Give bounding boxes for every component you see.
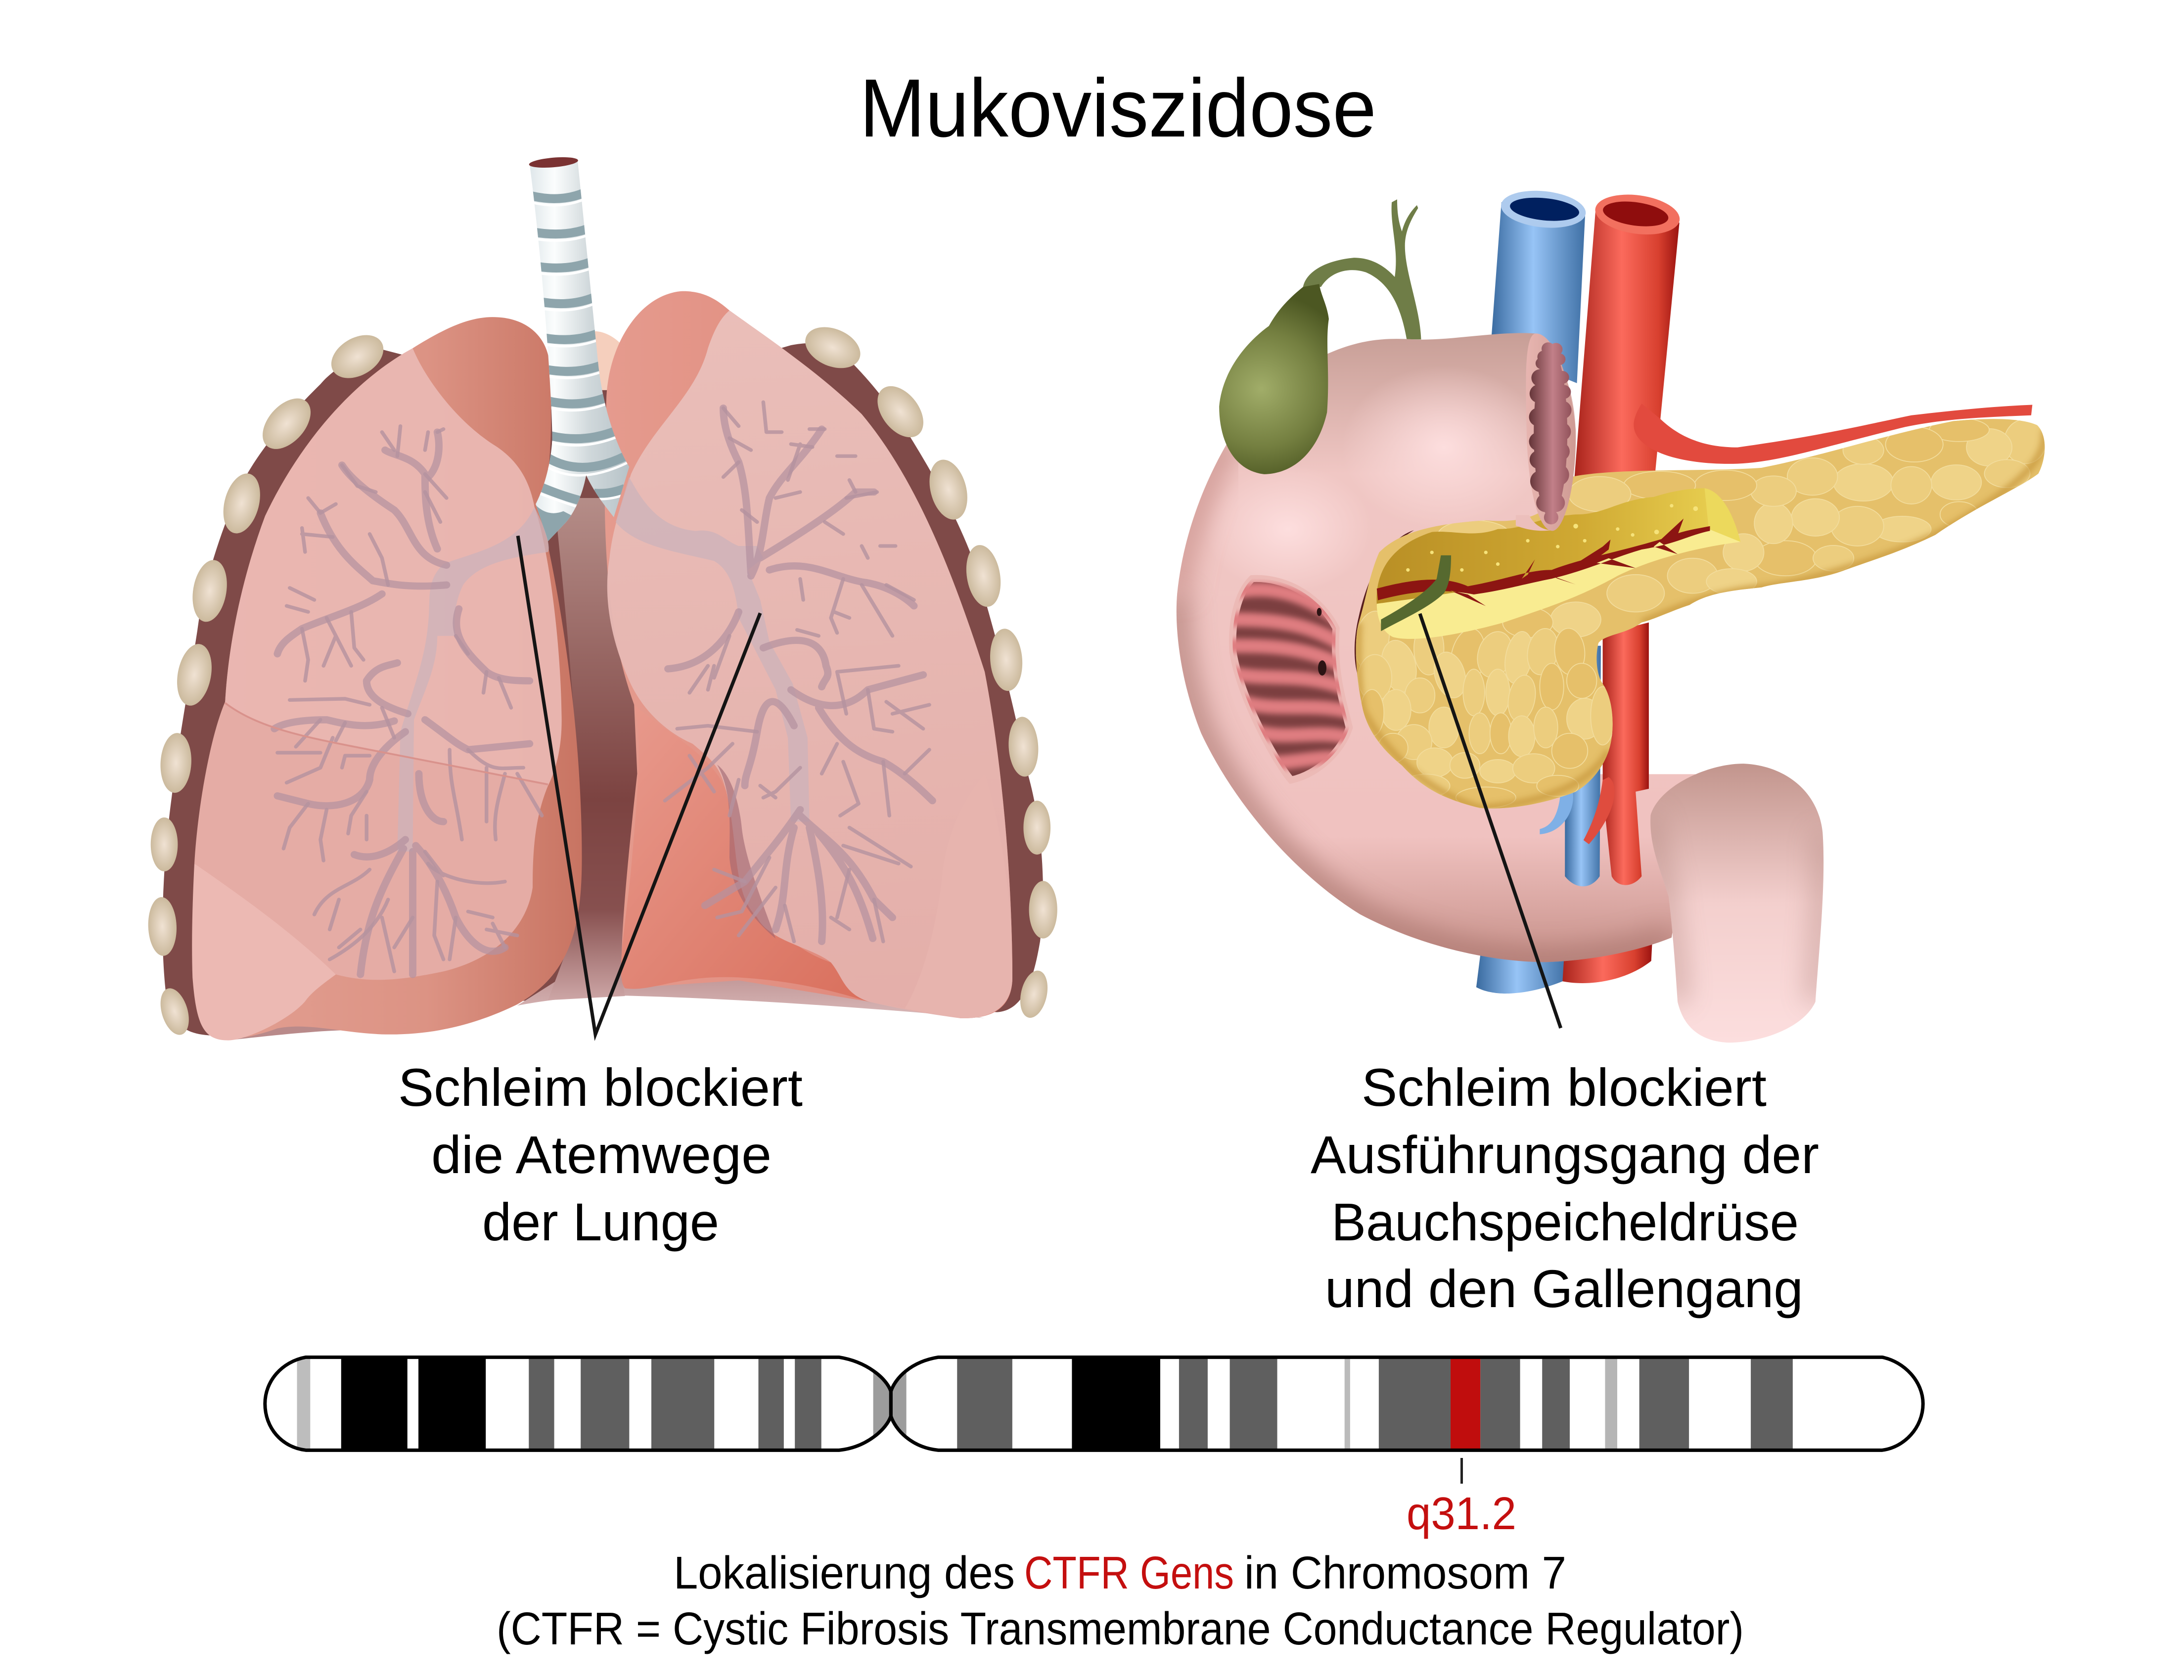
gallbladder (1219, 284, 1329, 474)
left lung upper lobe (225, 348, 562, 786)
pancreatic duct (1377, 519, 1710, 606)
shadow beside pancreas head (1355, 530, 1414, 685)
caption line 1: in Chromosom 7 (1244, 1547, 1566, 1598)
rib cross sections (147, 319, 1057, 1038)
right lung base (604, 291, 1012, 1018)
peach tissue behind trachea (579, 331, 625, 390)
heart-side salmon region (621, 705, 871, 1002)
diaphragm sliver left (228, 1024, 345, 1041)
locus tick (1460, 1458, 1463, 1484)
lung fold shadow (717, 765, 775, 939)
splenic artery (1634, 404, 2032, 464)
label: pancreatic and bile ducts: Bauchspeicheldrüse (1331, 1192, 1799, 1252)
chromosome outline (265, 1357, 1923, 1450)
left lung lower lobe (194, 702, 548, 980)
mediastinum (548, 498, 640, 1000)
left lung lobe fissure (225, 703, 548, 784)
label: pancreatic and bile ducts: Schleim blockiert (1362, 1057, 1767, 1117)
locus label: q31.2 (1407, 1488, 1516, 1539)
label: lung airways: der Lunge (482, 1192, 719, 1252)
bile duct (1303, 199, 1421, 339)
left lung basal lobe (192, 863, 336, 1041)
artery middle segment (1603, 623, 1649, 885)
CFTR locus band (1451, 1357, 1480, 1450)
vein middle segment (1565, 646, 1601, 886)
duodenum (1177, 333, 1695, 962)
right lung side lobe (905, 773, 1012, 1018)
label: pancreatic and bile ducts: und den Gallengang (1325, 1259, 1803, 1318)
label: pancreatic and bile ducts (1311, 1057, 1819, 1318)
pancreas cut section (1376, 488, 1740, 639)
label: lung airways: die Atemwege (431, 1125, 772, 1184)
chromosome 7 ideogram (265, 1355, 1923, 1453)
caption line 1 (674, 1547, 1566, 1598)
pancreas (1350, 418, 2046, 809)
diaphragm band (517, 974, 985, 1018)
panel: lungs illustration (147, 156, 1057, 1041)
vein upper segment (1491, 187, 1588, 383)
small arterial branch (1584, 777, 1615, 844)
small venous branch (1540, 792, 1573, 834)
right lung front lobes (607, 311, 1012, 1018)
label: pancreatic and bile ducts: Ausführungsgang der (1311, 1125, 1819, 1184)
right bronchial tree (616, 402, 932, 942)
duodenum cut end with lumen (1516, 333, 1576, 531)
caption line 1: Lokalisierung des (674, 1547, 1015, 1598)
caption line 1: CTFR Gens (1024, 1547, 1234, 1598)
left bronchial tree (274, 426, 549, 974)
leader line: ducts (1420, 614, 1561, 1028)
vein and artery lower ends (1476, 938, 1652, 994)
duodenum wall opening with folds (1228, 579, 1354, 780)
leader lines: airways (518, 536, 760, 1034)
label: lung airways: Schleim blockiert (398, 1057, 803, 1117)
rib cage wall (163, 343, 1043, 1036)
label: lung airways (398, 1057, 803, 1252)
pancreas lobules (1350, 418, 2046, 808)
duodenum horizontal end (1650, 764, 1823, 1043)
panel: pancreas and duodenum illustration (1177, 187, 2046, 1043)
left lung base (192, 317, 582, 1039)
caption line 2: (CTFR = Cystic Fibrosis Transmembrane Conductance Regulator) (497, 1603, 1744, 1654)
title: Mukoviszidose (860, 62, 1376, 154)
trachea (529, 156, 631, 546)
bile duct inside pancreas (1381, 555, 1451, 631)
cut-section dots (1406, 504, 1698, 572)
artery upper segment (1575, 190, 1683, 477)
